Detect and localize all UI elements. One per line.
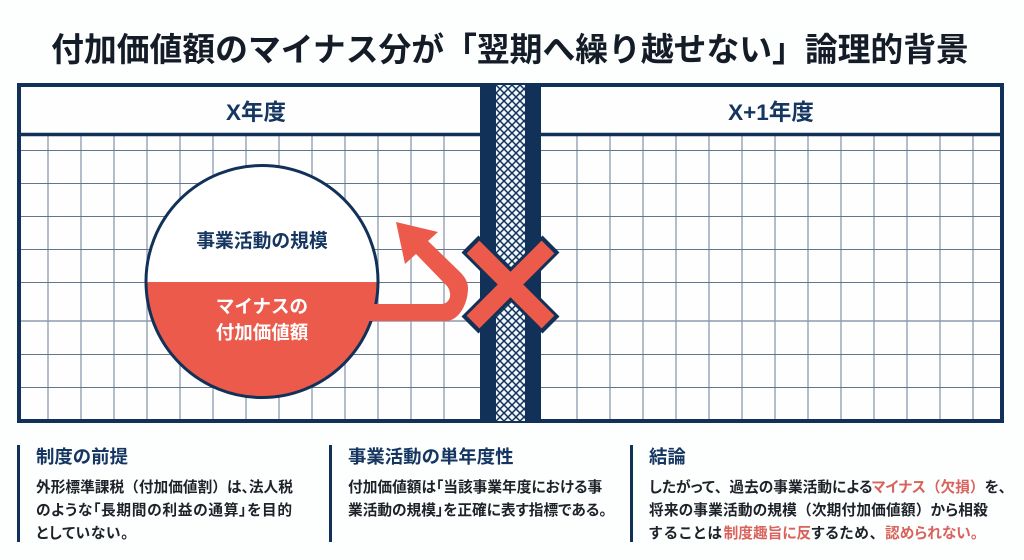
- title: 付加価値額のマイナス分が「翌期へ繰り越せない」論理的背景: [51, 31, 969, 68]
- text: single-year body: [348, 479, 607, 519]
- barrier: fiscal year wall: [480, 83, 541, 423]
- heading: X+1 year: X+1年度: [728, 100, 814, 125]
- panel: single-year nature: [329, 445, 607, 542]
- label: negative value added: マイナスの: [216, 296, 308, 317]
- heading: single-year nature: 事業活動の単年度性: [348, 446, 514, 467]
- text: premise body: としていない。: [36, 526, 129, 542]
- text: conclusion body: したがって、過去の事業活動によるマイナス（欠損）を、: [649, 480, 1006, 496]
- text: premise body: [36, 479, 293, 542]
- label: business activity scale: 事業活動の規模: [196, 230, 328, 251]
- heading: conclusion: 結論: [649, 446, 686, 467]
- circle: business activity scale: [146, 166, 378, 398]
- text: conclusion body: することは制度趣旨に反するため、認められない。: [649, 526, 978, 542]
- heading: X year: X年度: [226, 100, 286, 125]
- text: conclusion body: 将来の事業活動の規模（次期付加価値額）から相殺: [649, 503, 988, 519]
- panel: premise: [17, 445, 293, 542]
- panel: year grid frame: [19, 85, 1002, 421]
- panel: conclusion: [630, 445, 1006, 542]
- text: single-year body: 付加価値額は「当該事業年度における事: [348, 480, 602, 496]
- arrow: blocked carry-forward turning back: [368, 222, 468, 321]
- text: premise body: のような「長期間の利益の通算」を目的: [36, 503, 293, 519]
- text: premise body: 外形標準課税（付加価値割）は、法人税: [36, 480, 293, 496]
- text: single-year body: 業活動の規模」を正確に表す指標である。: [348, 503, 607, 519]
- heading: premise: 制度の前提: [36, 446, 128, 467]
- label: negative value added: 付加価値額: [216, 322, 309, 343]
- icon: cross mark: [470, 244, 551, 325]
- text: conclusion body: [649, 479, 1006, 542]
